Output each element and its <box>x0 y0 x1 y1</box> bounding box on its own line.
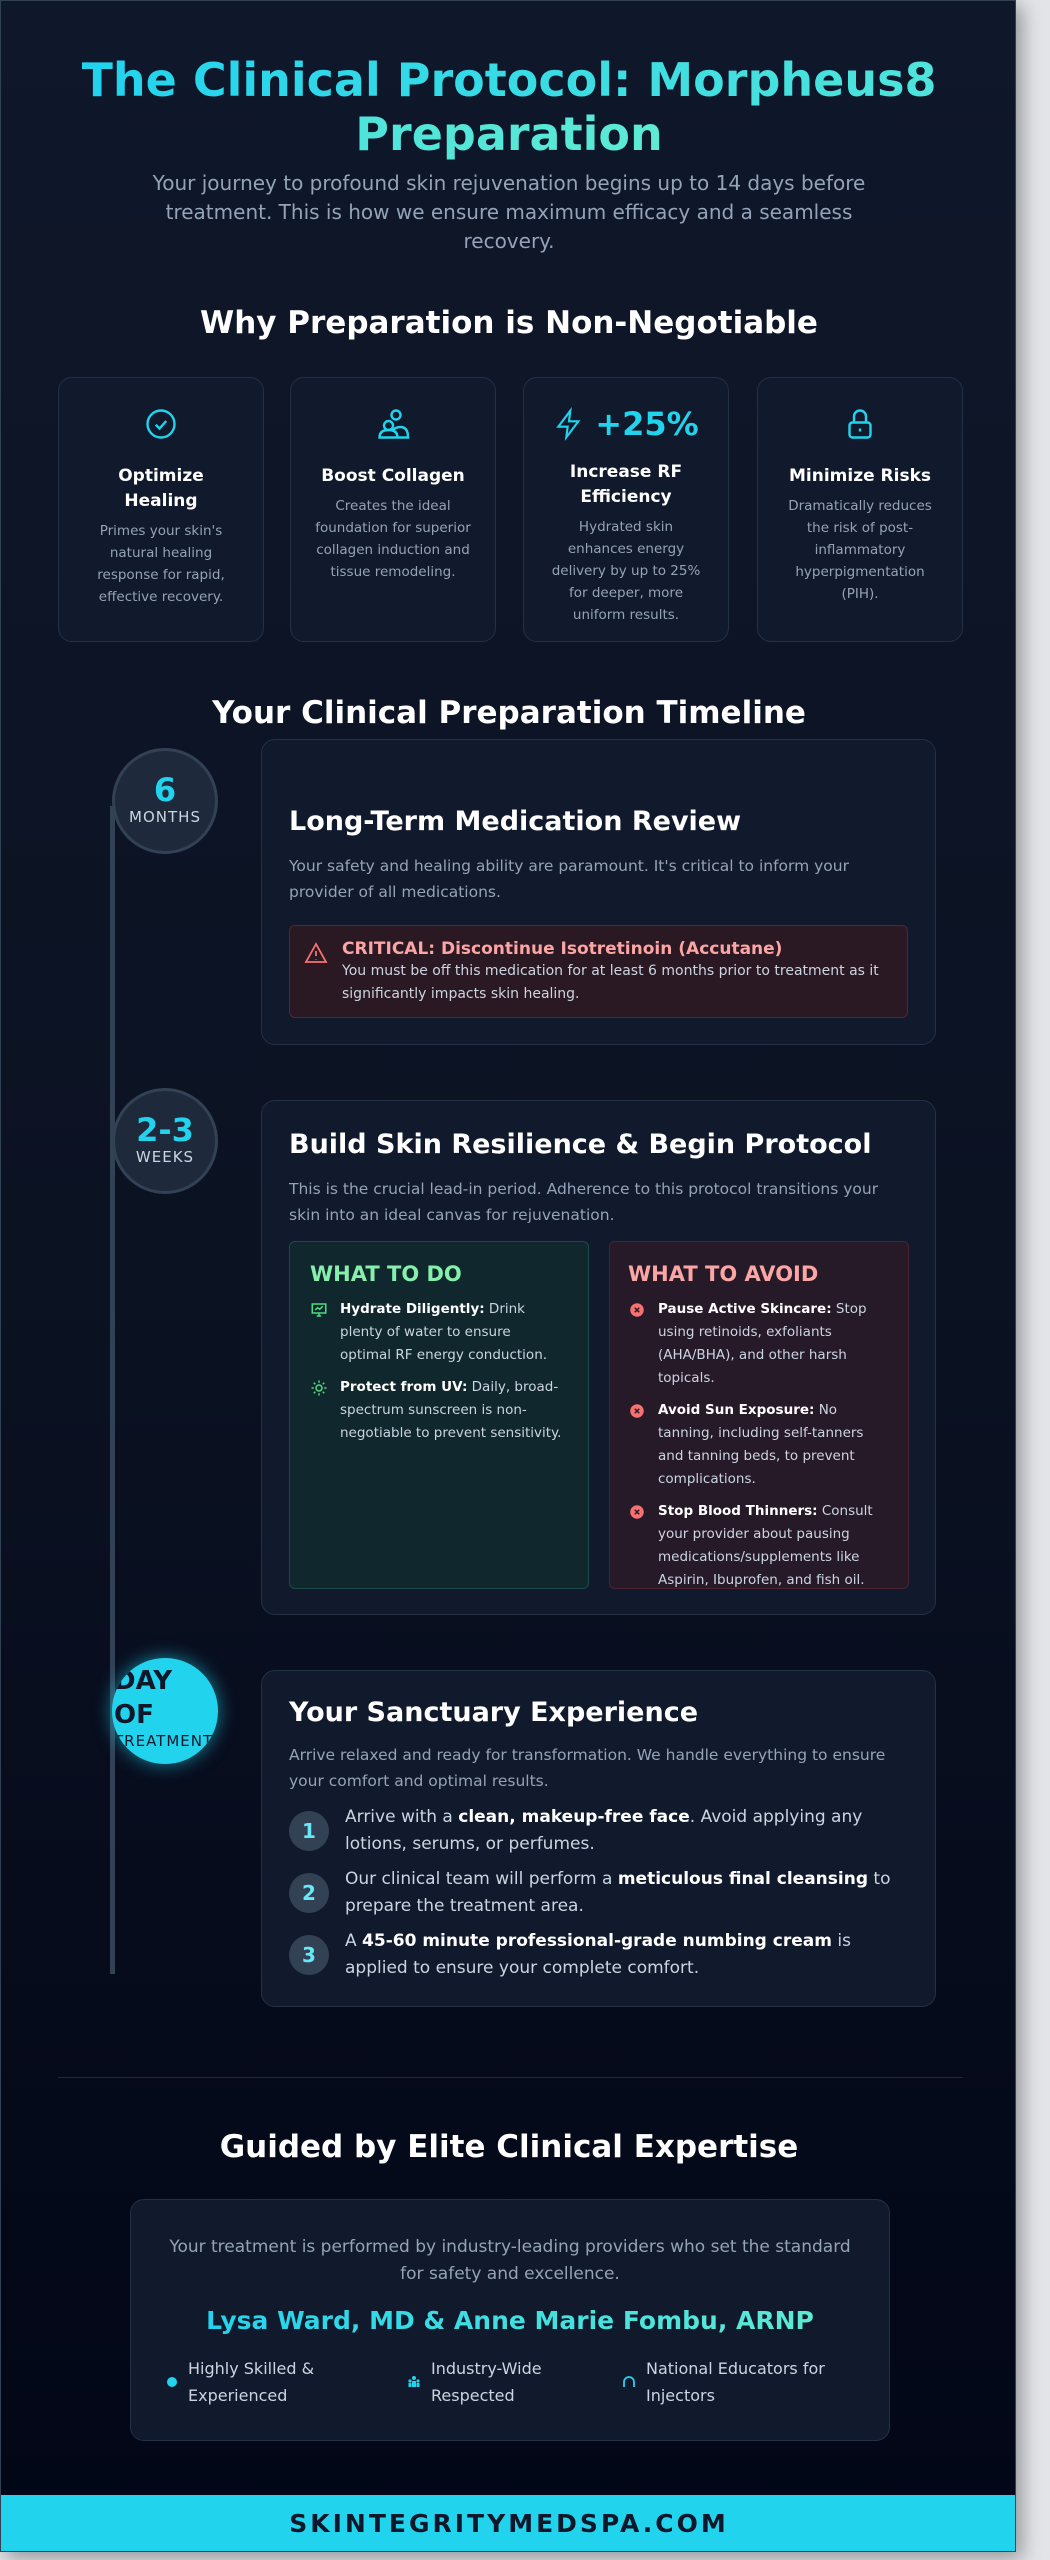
marker: day of treatment: TREATMENT <box>114 1732 213 1750</box>
card: optimize healing: Optimize <box>118 466 204 486</box>
features: Industry-Wide <box>431 2359 542 2378</box>
title <box>82 53 936 161</box>
heading: why preparation: Why Preparation is Non-Negotiable <box>200 305 818 341</box>
card: sanctuary experience: Your Sanctuary Experience <box>289 1697 698 1728</box>
card: boost collagen <box>290 377 496 642</box>
title: Preparation <box>355 107 663 161</box>
card: sanctuary experience: Arrive relaxed and ready for transformation. We handle everything to ensure your comfort and optimal results. <box>289 1746 885 1790</box>
panel: what to do: WHAT TO DO <box>310 1262 462 1286</box>
marker: 2-3 weeks: 2-3 <box>136 1111 194 1149</box>
card: optimize healing: Healing <box>124 491 198 511</box>
features: Injectors <box>646 2386 715 2405</box>
card: optimize healing: Primes your skin's natural healing response for rapid, effective recovery. <box>97 523 225 605</box>
heading: expertise: Guided by Elite Clinical Expertise <box>220 2129 798 2165</box>
steps: 2 <box>302 1881 316 1905</box>
callout: critical: CRITICAL: Discontinue Isotretinoin (Accutane) <box>342 939 782 959</box>
callout: critical: You must be off this medication for at least 6 months prior to treatment as it significantly impacts skin healing. <box>342 963 879 1002</box>
card: build skin resilience: This is the crucial lead-in period. Adherence to this protocol transitions your skin into an ideal canvas for rejuvenation. <box>289 1180 878 1224</box>
provider names: Lysa Ward, MD & Anne Marie Fombu, ARNP <box>206 2306 814 2335</box>
marker: 6 months: 6 <box>154 771 176 809</box>
marker: 2-3 weeks <box>112 1088 218 1194</box>
marker: day of treatment <box>112 1658 218 1764</box>
marker: 6 months: MONTHS <box>129 808 201 826</box>
panel: what to avoid: Stop Blood Thinners: Consult your provider about pausing medications/supplements like Aspirin, Ibuprofen, and fish oil. <box>658 1503 873 1588</box>
features: Respected <box>431 2386 515 2405</box>
card: minimize risks: Dramatically reduces the risk of post-inflammatory hyperpigmentation (PIH). <box>788 498 932 602</box>
card: build skin resilience: Build Skin Resilience & Begin Protocol <box>289 1129 871 1160</box>
card: long-term medication review <box>261 739 936 1045</box>
card: minimize risks <box>757 377 963 642</box>
panel: what to avoid: Pause Active Skincare: Stop using retinoids, exfoliants (AHA/BHA), and other harsh topicals. <box>658 1301 867 1386</box>
steps: Our clinical team will perform a meticulous final cleansing to prepare the treatment area. <box>345 1869 890 1916</box>
icon: people <box>378 409 410 439</box>
panel: what to do: Hydrate Diligently: Drink plenty of water to ensure optimal RF energy conduction. <box>340 1301 547 1363</box>
panel: what to avoid <box>609 1241 909 1589</box>
icon: lock <box>848 409 872 439</box>
callout: critical <box>289 925 908 1018</box>
card: increase rf efficiency: Efficiency <box>580 487 672 507</box>
heading: timeline: Your Clinical Preparation Timeline <box>212 695 806 731</box>
icon: bolt +25%: +25% <box>595 405 699 443</box>
card: increase rf efficiency: Hydrated skin enhances energy delivery by up to 25% for deeper, more uniform results. <box>552 519 700 623</box>
marker: 2-3 weeks: WEEKS <box>136 1148 194 1166</box>
marker: day of treatment: DAY <box>114 1666 172 1696</box>
card: boost collagen: Creates the ideal foundation for superior collagen induction and tissue remodeling. <box>315 498 471 580</box>
card: long-term medication review: Your safety and healing ability are paramount. It's critical to inform your provider of all medications. <box>289 857 849 901</box>
card: optimize healing <box>58 377 264 642</box>
card: expertise <box>130 2199 890 2441</box>
marker: day of treatment: OF <box>114 1700 154 1730</box>
title: The Clinical Protocol: Morpheus8 <box>82 53 936 107</box>
steps: Arrive with a clean, makeup-free face. Avoid applying any lotions, serums, or perfumes. <box>345 1807 862 1854</box>
panel: what to do: Protect from UV: Daily, broad-spectrum sunscreen is non-negotiable to prevent sensitivity. <box>340 1379 561 1441</box>
steps <box>289 1807 890 1978</box>
features <box>167 2359 825 2405</box>
features: National Educators for <box>646 2359 825 2378</box>
panel: what to avoid: WHAT TO AVOID <box>628 1262 818 1286</box>
icon: check circle <box>146 409 176 439</box>
subtitle: Your journey to profound skin rejuvenation begins up to 14 days before treatment. This is how we ensure maximum efficacy and a seamless recovery. <box>153 171 865 253</box>
card: build skin resilience <box>261 1100 936 1615</box>
card: sanctuary experience <box>261 1670 936 2007</box>
card: expertise: Your treatment is performed by industry-leading providers who set the standard for safety and excellence. <box>169 2237 851 2284</box>
card: increase rf efficiency: Increase RF <box>570 462 682 482</box>
timeline line <box>110 806 115 1974</box>
panel: what to avoid: Avoid Sun Exposure: No tanning, including self-tanners and tanning beds, to prevent complications. <box>658 1402 863 1487</box>
card: increase rf efficiency <box>523 377 729 642</box>
features: Experienced <box>188 2386 287 2405</box>
footer <box>1 2495 1017 2553</box>
icon: warning <box>304 942 328 963</box>
card: boost collagen: Boost Collagen <box>321 466 465 486</box>
panel: what to do <box>289 1241 589 1589</box>
steps: 3 <box>302 1943 316 1967</box>
steps: A 45-60 minute professional-grade numbing cream is applied to ensure your complete comfort. <box>345 1931 851 1978</box>
steps: 1 <box>302 1819 316 1843</box>
footer: SKINTEGRITYMEDSPA.COM <box>289 2509 729 2538</box>
card: minimize risks: Minimize Risks <box>789 466 931 486</box>
features: Highly Skilled & <box>188 2359 314 2378</box>
card: long-term medication review: Long-Term Medication Review <box>289 806 741 837</box>
marker: 6 months <box>112 748 218 854</box>
